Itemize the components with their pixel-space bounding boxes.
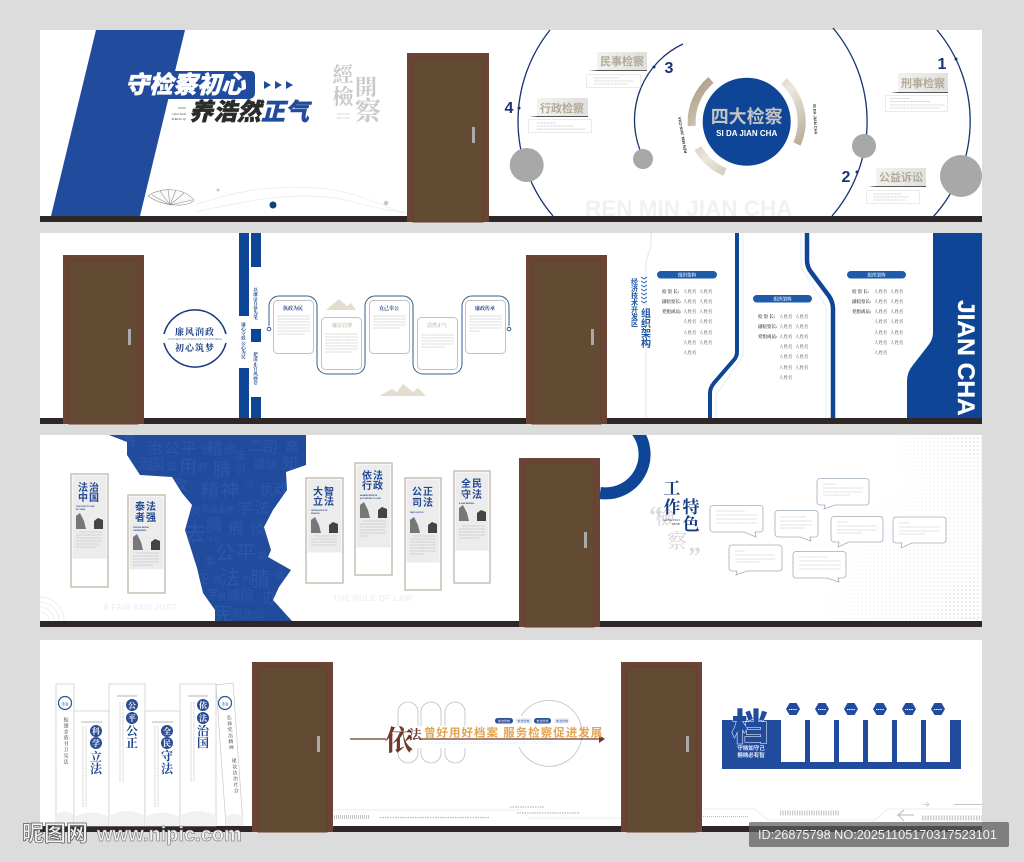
door 1 (252, 662, 333, 832)
org list 2: 组织架构 (774, 296, 792, 302)
blue torn shape with word texture: 腈 (250, 568, 270, 591)
frame: 大智立法: 法 (324, 495, 334, 508)
banner 4: 守 (161, 749, 173, 763)
blue torn shape with word texture: 去 (184, 521, 206, 546)
banner 1: 法治 (62, 701, 69, 706)
blue torn shape with word texture: 公 (164, 440, 180, 457)
pills (495, 718, 570, 724)
blue torn shape with word texture: 法 (234, 448, 246, 462)
banner 5 (180, 684, 216, 826)
org list 3: 人姓名 (890, 288, 904, 295)
org list 3 (847, 271, 906, 356)
slogan arrow: 法 (408, 727, 422, 742)
blue torn shape with word texture: 正 (197, 572, 209, 586)
org list 1: 人姓名 (699, 288, 713, 295)
blue torn shape with word texture: 治 (147, 440, 163, 457)
org list 3: 人姓名 (890, 308, 904, 315)
blue torn shape with word texture: 腈 (213, 460, 231, 480)
card: administrative (528, 98, 592, 132)
blue torn shape with word texture: 高 (257, 550, 267, 563)
frame: 泰法者强: STRONG BEGIN (133, 527, 149, 529)
heading: work features (649, 479, 701, 571)
emblem: integrity: 初心筑梦 (175, 342, 215, 353)
frame: 依法行政: 法 (373, 469, 383, 482)
card: 克己奉公: 克己奉公 (379, 305, 399, 312)
legal banners (56, 683, 243, 826)
heading: organisation (630, 277, 650, 349)
frame: 依法行政: 行 (362, 479, 372, 492)
blue torn shape with word texture: 法治 (206, 534, 220, 543)
blue torn shape with word texture: 用 (179, 457, 197, 477)
frame: 法治中国: 国 (89, 492, 99, 504)
org list 3: 人姓名 (890, 339, 904, 346)
blue torn shape with word texture: 精 (207, 440, 223, 458)
banner 4: 民 (163, 739, 171, 748)
central badge (677, 78, 819, 172)
org list 3: 副检察长: (852, 298, 872, 305)
org list 1: 人姓名 (699, 318, 713, 325)
org list 3: 人姓名 (890, 329, 904, 336)
bubble 5 (817, 478, 869, 509)
blue torn shape with word texture: 精 (201, 481, 219, 501)
card: 浩然正气: 浩然正气 (427, 322, 447, 329)
org list 2: 人姓名 (779, 353, 793, 360)
banner 5: 国 (197, 735, 209, 750)
org list 1: 副检察长: (662, 298, 682, 305)
orbit arcs (518, 28, 970, 217)
card: 廉洁自律 (322, 318, 362, 370)
slogan arrow: 曾好用好档案 服务检察促进发展 (424, 726, 603, 740)
heading: work features: 作 (664, 498, 680, 517)
org list 2: 人姓名 (779, 364, 793, 371)
door 2 (621, 662, 702, 832)
frame: 公正司法: FAIR JUSTICE (410, 511, 424, 514)
org list 1 (657, 271, 717, 356)
heading: work features: 檢 (655, 506, 675, 529)
hexagon badges (786, 703, 945, 715)
central badge: 四大检察 (711, 106, 783, 127)
card: criminal (886, 73, 948, 112)
banner 3: 平 (128, 713, 136, 723)
blue torn shape with word texture: 痕 (228, 520, 244, 538)
frame: 依法行政: 政 (373, 479, 383, 492)
org list 1: 人姓名 (683, 339, 697, 346)
blue torn shape with word texture: 高 (285, 439, 299, 454)
card: administrative: 行政检察 (540, 101, 584, 115)
org list 3: 人姓名 (874, 308, 888, 315)
card: civil: 民事检察 (600, 54, 644, 68)
watermark: id box: ID:26875798 NO:20251105170317523101 (758, 828, 997, 842)
blue torn shape with word texture: 贯 (124, 434, 136, 448)
frame: 全民守法 (454, 471, 490, 583)
blue torn shape with word texture: 哭 (191, 506, 201, 518)
banner 1 (56, 684, 74, 826)
banner 3: 正 (126, 735, 138, 750)
blue torn shape with word texture: 法 (246, 478, 254, 488)
heading: work features: GONGZUO (662, 518, 680, 522)
watermark text: REN MIN JIAN CHA (585, 196, 793, 221)
vertical slogans (241, 287, 258, 385)
frame: 泰法者强: 泰 (135, 500, 145, 513)
org list 2: 人姓名 (779, 374, 793, 381)
central badge: REN MIN JIAN CHA (677, 116, 688, 154)
frame: 公正司法: 司 (412, 497, 422, 509)
blue torn shape with word texture: 诚信 (226, 587, 254, 603)
watermark: nipic logo: 昵图网 (22, 821, 88, 846)
bubble 1 (710, 506, 763, 537)
org list 3: 人姓名 (874, 288, 888, 295)
blue torn shape with word texture: 国 (150, 456, 164, 472)
org list 2 (753, 295, 812, 381)
bubble 3 (775, 510, 818, 541)
card: 廉洁自律: 廉洁自律 (332, 322, 352, 329)
numbers: 4 (505, 100, 514, 117)
org list 1: 人姓名 (683, 329, 697, 336)
watermark: id box (749, 822, 1009, 847)
frame: 大智立法: 智 (324, 485, 334, 498)
blue torn shape with word texture: 执 (260, 482, 274, 498)
watermark: nipic logo (22, 821, 242, 846)
blue torn shape with word texture: 二 (249, 438, 263, 454)
vertical slogans: 廉心守政 公心为民 (241, 321, 246, 361)
card: 浩然正气 (418, 318, 458, 370)
banner 3: 公 (128, 701, 136, 710)
grey calligraphy: 開 (355, 75, 377, 100)
blue torn shape with word texture: 政 (275, 569, 285, 580)
title banner: 守检察初心 (125, 72, 246, 99)
icon: lotus leaf (148, 189, 194, 205)
arrows (264, 81, 293, 89)
frame: 公正司法 (405, 478, 441, 590)
pills: 依法管档 (536, 718, 549, 723)
org list 2: 党组成员: (758, 333, 778, 340)
frame: 全民守法: 法 (472, 488, 482, 501)
blue torn shape with word texture: 治 (200, 443, 210, 456)
blue parallelogram (51, 30, 185, 216)
org list 1: 人姓名 (683, 288, 697, 295)
heading: work features: 察 (667, 530, 687, 553)
banner 3 (109, 684, 145, 826)
blue torn shape with word texture: 法 (254, 500, 270, 517)
org list 1: 人姓名 (699, 298, 713, 305)
central badge: SI DA JIAN CHA (812, 104, 819, 135)
grey calligraphy: JIAN XIA (337, 112, 349, 116)
blue torn shape with word texture: 心 (191, 554, 201, 564)
card: public interest (866, 168, 926, 204)
grey calligraphy: 檢 (332, 85, 354, 109)
card: civil (586, 52, 647, 88)
org list 1: 人姓名 (683, 349, 697, 356)
timeline path (267, 296, 511, 374)
blue torn shape with word texture: 诚信 (253, 457, 277, 471)
blue torn shape with word texture: 知 (282, 455, 298, 473)
frame: 法治中国: 治 (89, 481, 99, 494)
banner 3: 公 (126, 724, 138, 738)
watermark: nipic logo: www.nipic.com (96, 824, 242, 846)
card: 廉政传承 (466, 300, 506, 354)
frame: 全民守法: A LAW ABIDING (459, 502, 475, 505)
archive shelf (722, 703, 961, 769)
frame: 大智立法: LEGISLATION OF (311, 509, 328, 512)
frame: 泰法者强: 法 (146, 500, 156, 513)
frame: 依法行政 (355, 463, 392, 575)
blue torn shape with word texture: 腈 (206, 516, 222, 534)
mountains (326, 299, 426, 396)
card: public interest: 公益诉讼 (879, 170, 923, 184)
blue torn shape with word texture: 事 (205, 555, 215, 568)
side title: JIAN CHA (952, 300, 979, 416)
banner 1: 振翅金盾书卫宪法 (62, 716, 68, 765)
org list 1: 人姓名 (699, 339, 713, 346)
blue torn shape with word texture: 神 (221, 481, 239, 501)
numbers (505, 56, 947, 186)
banner 2: 立 (90, 749, 102, 764)
tech line decoration (333, 807, 700, 818)
frame: 法治中国: 中 (78, 491, 88, 504)
archive shelf: 档 (732, 707, 768, 748)
frame: 法治中国: IN CHINA (76, 508, 85, 511)
org list 1: 人姓名 (683, 318, 697, 325)
slogan arrow: 依 (385, 725, 413, 757)
blue torn shape with word texture: 尊 (213, 574, 223, 585)
bubble 2 (729, 545, 782, 575)
blue torn shape with word texture: 执 (242, 573, 252, 584)
card: 廉政传承: 廉政传承 (475, 305, 495, 312)
org list 1: 党组成员: (662, 308, 682, 315)
bubble 7 (893, 517, 946, 548)
door (407, 53, 489, 222)
blue torn shape with word texture: 法 (167, 460, 177, 473)
grey calligraphy (332, 63, 381, 126)
banner 4: 全 (163, 726, 171, 736)
org list 1: 人姓名 (683, 298, 697, 305)
org list 2: 检 察 长: (758, 313, 776, 320)
frame: 全民守法: 全 (461, 477, 471, 490)
org list 3: 人姓名 (890, 318, 904, 325)
org list 2: 人姓名 (779, 323, 793, 330)
slogan arrow: YIFA GUANHAOYONGHAODANGAN FUWU JIANCHACUJINFAZHAN (424, 741, 554, 745)
blue torn shape with word texture: 引 (234, 463, 246, 477)
banner 6: 弘扬宪法精神 (225, 714, 234, 752)
org list 2: 副检察长: (758, 323, 778, 330)
blue torn shape with word texture: 精 (198, 461, 208, 472)
panel: wall 2 integrity and organisation (40, 233, 982, 424)
org list 2: 人姓名 (779, 313, 793, 320)
bubble 4 (793, 552, 846, 582)
tech line decoration right (703, 802, 982, 821)
banner 2: 法 (90, 761, 103, 776)
banner 2: 科 (92, 726, 100, 736)
subtitle: HAO RAN (172, 112, 186, 116)
archive shelf: 守档如守己 (737, 744, 765, 752)
numbers: 3 (665, 60, 674, 77)
frame: 全民守法: 守 (461, 488, 471, 501)
blue torn shape with word texture: 政 (224, 442, 236, 456)
blue torn shape with word texture: 办 (262, 589, 278, 607)
numbers: 2 (842, 169, 851, 186)
banner 5: 法 (199, 713, 208, 723)
heading: organisation: 经济技术开发区 (630, 277, 638, 327)
org list 3: 组织架构 (868, 272, 886, 278)
blue torn shape with word texture (109, 434, 306, 624)
org list 3: 人姓名 (874, 339, 888, 346)
org list 1: 组织架构 (678, 272, 696, 278)
blue torn shape with word texture: 政 (274, 481, 288, 497)
banner 4 (145, 711, 180, 826)
blue torn shape with word texture: 治 (138, 456, 152, 472)
panel: wall 3 rule of law (40, 430, 982, 627)
blue torn shape with word texture: 宪 (214, 604, 232, 624)
frame: 依法行政: 依 (362, 469, 372, 482)
blue torn shape with word texture: 公 (215, 543, 235, 565)
org list 3: 人姓名 (874, 329, 888, 336)
panel: wall 1 four procuratorates (40, 28, 982, 222)
blue torn shape with word texture: 法 (220, 567, 240, 590)
frame: 全民守法: 民 (472, 478, 482, 490)
card: criminal: 刑事检察 (901, 76, 945, 90)
org list 2: 人姓名 (779, 343, 793, 350)
slogan arrow (350, 725, 605, 757)
subtitle: ZHENG QI (171, 117, 186, 121)
banner 6: 建设法治社会 (230, 757, 239, 795)
orbit nodes (510, 58, 982, 197)
blue torn shape with word texture: 谈 (249, 520, 265, 538)
door (519, 458, 600, 627)
halftone dots (838, 437, 982, 619)
org list 3: 人姓名 (874, 318, 888, 325)
heading: work features: 工 (664, 479, 680, 498)
frame: 泰法者强: LAWMAKERS (133, 529, 147, 532)
blue ring (600, 430, 645, 493)
faint captions: THE RULE OF LAW (333, 594, 412, 603)
pills: 依法管档 (498, 718, 510, 723)
frame: 法治中国 (71, 474, 108, 587)
heading: work features: TESE (672, 522, 680, 526)
blue torn shape with word texture: 学 (237, 500, 253, 517)
frame: 依法行政: ADMINISTRATION (360, 494, 378, 497)
vertical blue bars (239, 233, 261, 418)
heading: work features: ” (688, 542, 701, 571)
banner 6 (216, 683, 243, 825)
blue torn shape with word texture: 司法公 (232, 607, 264, 621)
frame: 大智立法 (306, 478, 343, 583)
loops and circle (398, 700, 582, 766)
door right (526, 255, 607, 424)
frame: 大智立法: 大 (313, 485, 323, 498)
frame: 大智立法: 立 (313, 495, 323, 508)
frame: 泰法者强: 强 (146, 512, 156, 524)
corner arcs (40, 597, 64, 621)
vertical slogans: 把清正官风画卷 (253, 351, 258, 385)
org list 2: 人姓名 (795, 323, 809, 330)
org list 1: 人姓名 (683, 308, 697, 315)
frame: 公正司法: 正 (423, 486, 433, 498)
blue torn shape with word texture: 学 (207, 586, 219, 601)
faint captions (103, 594, 412, 612)
banner 2: 学 (92, 738, 100, 748)
frame: 公正司法: 法 (423, 496, 433, 509)
blue torn shape with word texture: 执 (217, 591, 227, 602)
org list 2: 人姓名 (779, 333, 793, 340)
numbers: 1 (938, 56, 947, 73)
org list 3: 检 察 长: (852, 288, 870, 295)
org list 2: 人姓名 (795, 343, 809, 350)
archive shelf: 拥档必有智 (737, 751, 765, 759)
faint captions: A FAIR AND JUST (103, 603, 177, 612)
org list 3: 人姓名 (890, 298, 904, 305)
subtitle: 养浩然正气 (189, 99, 312, 126)
org list 3: 人姓名 (874, 298, 888, 305)
blue torn shape with word texture: 平 (236, 543, 256, 565)
blue torn shape with word texture: 陈尚品德 (202, 504, 234, 514)
frame: 依法行政: ACCORDING TO LAW (360, 497, 381, 500)
grey calligraphy: 察 (355, 96, 381, 126)
banner 5: 治 (197, 723, 210, 738)
heading: work features: 特 (682, 497, 700, 517)
emblem: integrity: LIAN FENG RUN ZHENG CHU XIN ZHU MENG (168, 338, 222, 341)
bubble 6 (831, 516, 883, 547)
heading: work features: “ (649, 501, 662, 530)
org list 3: 党组成员: (852, 308, 872, 315)
frame: 泰法者强: 者 (135, 511, 145, 524)
central badge: SI DA JIAN CHA (716, 129, 777, 138)
org list 1: 人姓名 (699, 308, 713, 315)
frame: 公正司法: 公 (412, 486, 422, 498)
card: 执政为民 (274, 300, 314, 354)
banner 4: 法 (161, 761, 174, 776)
pills: 依法管档 (517, 718, 530, 723)
org list 1: 人姓名 (699, 329, 713, 336)
org list 1: 检 察 长: (662, 288, 680, 295)
heading: work features: 色 (682, 514, 700, 534)
banner 6: 法治 (222, 701, 229, 706)
pills: 依法管档 (556, 718, 568, 723)
org list 2: 人姓名 (795, 364, 809, 371)
blue torn shape with word texture: 平 (181, 440, 197, 457)
emblem: integrity (164, 310, 226, 367)
frame: 泰法者强 (128, 495, 165, 593)
frame: 法治中国: 法 (78, 481, 88, 494)
heading: organisation: 组织架构 (638, 307, 650, 349)
subtitle: YANG (178, 106, 187, 110)
grey calligraphy: 經 (332, 63, 354, 87)
blue torn shape with word texture: 政 (173, 477, 187, 493)
vertical slogans: 以廉洁自律为笔 (253, 287, 258, 320)
org list 2: 人姓名 (795, 313, 809, 320)
card: 执政为民: 执政为民 (283, 305, 303, 312)
card: 克己奉公 (370, 300, 410, 354)
panel: wall 4 legal columns and archives (40, 640, 982, 832)
curved ribbons and side block (646, 233, 982, 418)
org list 2: 人姓名 (795, 333, 809, 340)
speech bubbles (710, 478, 946, 582)
banner 2 (74, 711, 109, 826)
blue torn shape with word texture: 司 (262, 440, 278, 457)
grey calligraphy: JIAN CHA (336, 116, 350, 120)
org list 3: 人姓名 (874, 349, 888, 356)
door left (63, 255, 144, 424)
frame: 大智立法: WISDOM (311, 513, 320, 515)
decorative waves and dots (195, 187, 407, 214)
frame: 法治中国: THE RULE OF LAW (76, 505, 94, 508)
banner 5: 依 (199, 700, 207, 710)
emblem: integrity: 廉风润政 (175, 326, 215, 337)
org list 2: 人姓名 (795, 353, 809, 360)
